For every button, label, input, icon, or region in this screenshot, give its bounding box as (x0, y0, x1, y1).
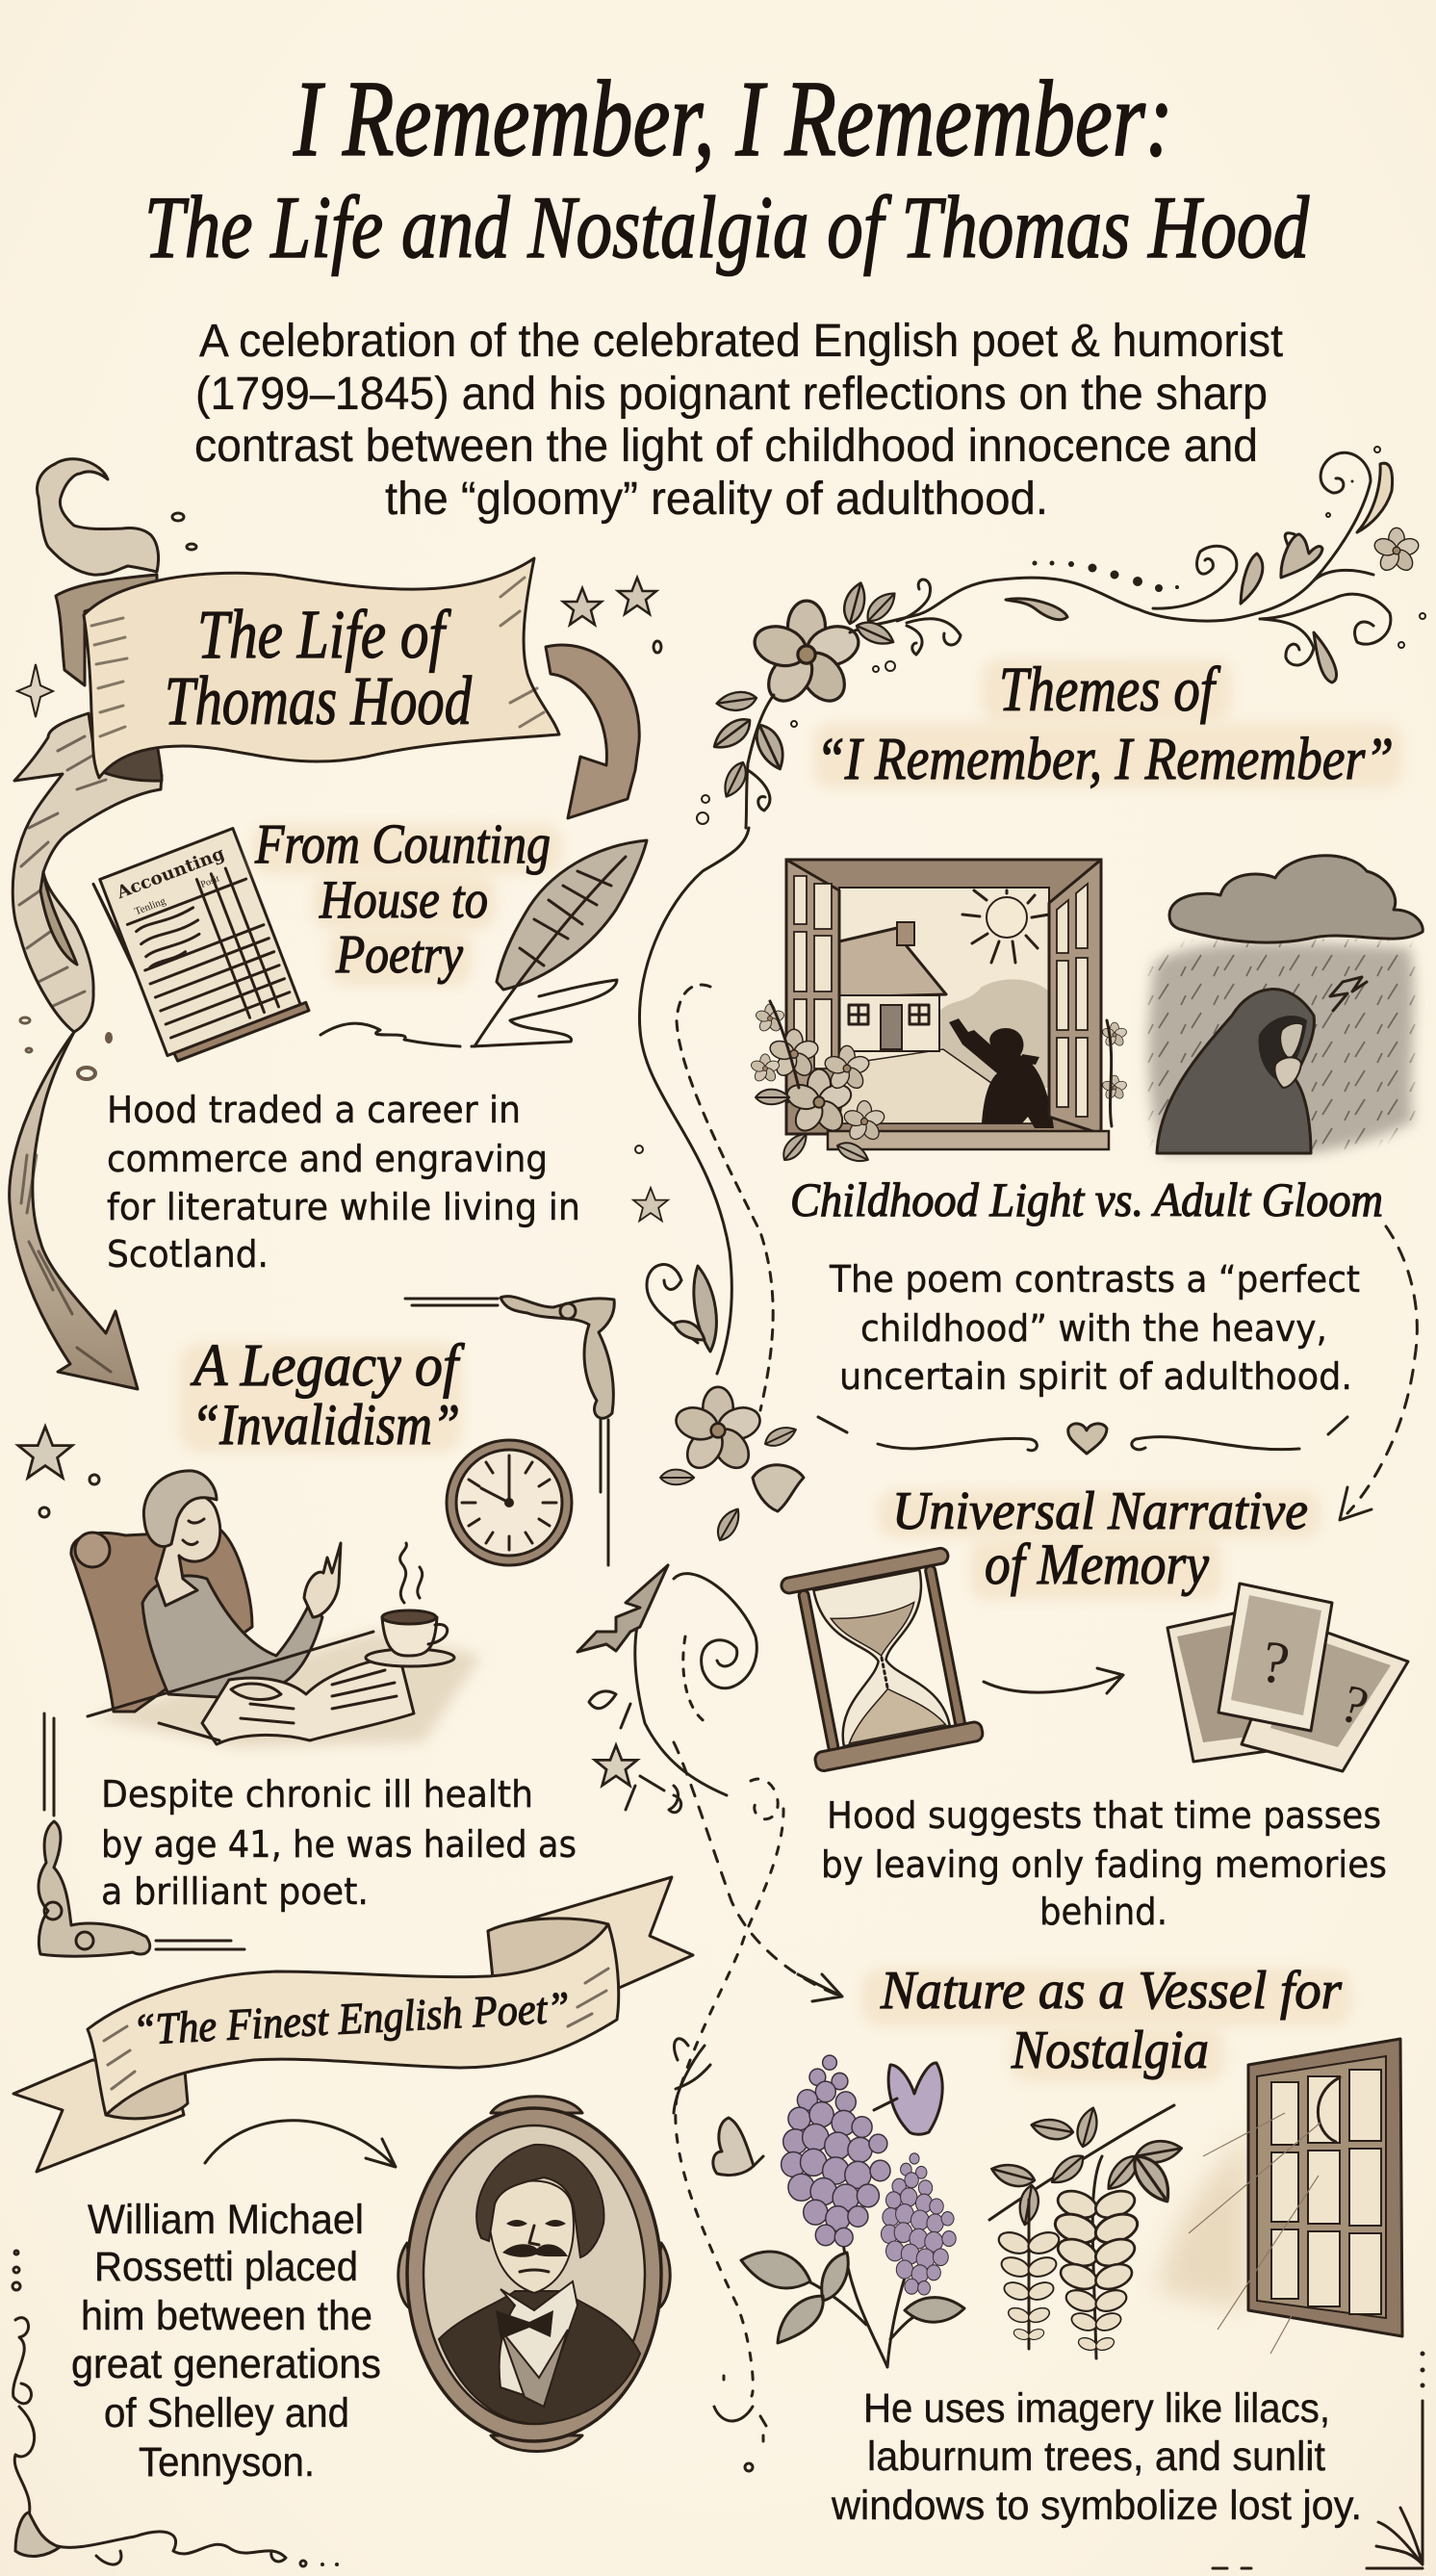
body text: Scotland. (107, 1233, 269, 1275)
section: the finest english poet (13, 1877, 693, 2486)
icon: clock (447, 1440, 572, 1565)
body text: him between the (81, 2293, 372, 2339)
heading: House to (319, 870, 488, 930)
body text: of Shelley and (104, 2390, 349, 2436)
divider with heart (818, 1417, 1347, 1454)
heading (179, 1333, 465, 1456)
banner title: The Life of (197, 596, 451, 673)
body text: childhood” with the heavy, (860, 1307, 1327, 1350)
heading: Nature as a Vessel for (880, 1961, 1342, 2021)
leaves by central flower (660, 1423, 804, 1544)
section: nature as a vessel for nostalgia (713, 1961, 1402, 2529)
icon: quill (321, 840, 647, 1046)
heading (861, 1961, 1352, 2082)
banner: “The Finest English Poet” (132, 1982, 571, 2054)
flowers at the sill (750, 1001, 1128, 1166)
decorative corner lower left of legacy (38, 1713, 244, 1956)
heading: “Invalidism” (192, 1393, 460, 1456)
body text (71, 2197, 381, 2486)
banner title: Thomas Hood (165, 662, 473, 739)
body text: by leaving only fading memories (821, 1843, 1387, 1886)
body text: a brilliant poet. (101, 1870, 369, 1913)
heading (878, 1481, 1321, 1600)
heading: A Legacy of (190, 1333, 465, 1399)
banner title (165, 596, 473, 739)
title: I Remember, I Remember: (293, 60, 1173, 179)
body text (821, 1794, 1387, 1933)
illustration: sunlit window (1155, 2039, 1402, 2354)
illustration: lilacs and butterflies (713, 2055, 964, 2367)
illustration: laburnum branch (989, 2105, 1183, 2358)
banner (13, 1877, 693, 2172)
intro text (194, 316, 1283, 525)
body text: He uses imagery like lilacs, (863, 2385, 1330, 2432)
section: from counting house to poetry (92, 812, 647, 1275)
body text: Tennyson. (139, 2439, 315, 2486)
body text: uncertain spirit of adulthood. (839, 1355, 1352, 1398)
banner: The Life of Thomas Hood (38, 459, 559, 781)
icon: accounting ledger: Accounting (114, 843, 228, 904)
long ribbon arrow: left side (10, 713, 162, 1389)
body text: Hood traded a career in (107, 1089, 521, 1131)
illustration: window with child (750, 860, 1128, 1166)
banner cloth (84, 558, 559, 778)
icon: accounting ledger: Tenling (133, 895, 167, 917)
heading: From Counting (254, 812, 551, 875)
body text (107, 1089, 580, 1275)
intro text: (1799–1845) and his poignant reflections on the sharp (195, 369, 1268, 420)
portrait medallion (398, 2097, 670, 2451)
body text (829, 1258, 1360, 1398)
icon: hourglass (781, 1547, 984, 1772)
dashed arrow to next theme (1340, 1226, 1417, 1520)
body text: windows to symbolize lost joy. (831, 2483, 1362, 2529)
heading: Nostalgia (1011, 2021, 1209, 2080)
heading: Poetry (335, 925, 463, 985)
body text (101, 1773, 577, 1913)
curved arrow beside banner (546, 645, 639, 818)
intro text: the “gloomy” reality of adulthood. (385, 474, 1048, 525)
body text: for literature while living in (107, 1186, 580, 1228)
body text (831, 2385, 1362, 2529)
body text: Hood suggests that time passes (827, 1794, 1381, 1837)
body text: Despite chronic ill health (101, 1773, 533, 1816)
arrow (205, 2121, 396, 2167)
illustration: hooded figure under storm cloud (1145, 856, 1423, 1155)
illustration: Hood at desk (71, 1471, 481, 1747)
body text: behind. (1039, 1891, 1167, 1933)
icon: fading photos (1167, 1584, 1408, 1771)
intro text: contrast between the light of childhood innocence and (194, 421, 1258, 472)
icon: accounting ledger (92, 826, 309, 1067)
decorative corner bottom right (1213, 2351, 1424, 2568)
title (144, 60, 1310, 276)
body text: great generations (71, 2341, 381, 2387)
stars and dots (18, 1427, 99, 1517)
body text: laburnum trees, and sunlit (867, 2434, 1325, 2480)
scroll curl (38, 459, 159, 575)
icon: fading photos: ? (1257, 1629, 1294, 1698)
decorative flourish bottom left (13, 2251, 339, 2566)
flourish and flower: top right (702, 447, 1425, 828)
icon: central flower (672, 1387, 764, 1475)
body text: William Michael (88, 2197, 364, 2243)
intro text: A celebration of the celebrated English poet & humorist (199, 316, 1283, 367)
central vine and swirls (577, 812, 842, 2471)
section: childhood light vs adult gloom (750, 856, 1423, 1520)
arrow (984, 1668, 1123, 1693)
body text: commerce and engraving (107, 1138, 548, 1180)
section heading: themes: Themes of (999, 655, 1220, 725)
section: universal narrative of memory (781, 1481, 1408, 1933)
icon: fading photos: ? (1334, 1673, 1375, 1738)
section: a legacy of invalidism (18, 1333, 577, 1913)
subheading: Childhood Light vs. Adult Gloom (790, 1172, 1383, 1226)
stars and sparkle near banner (17, 513, 661, 717)
decorative corner by legacy heading (405, 1297, 614, 1565)
icon: accounting ledger: Posit (199, 873, 221, 890)
body text: by age 41, he was hailed as (101, 1823, 577, 1866)
body text: Rossetti placed (94, 2244, 358, 2290)
heading (252, 812, 562, 986)
body text: The poem contrasts a “perfect (829, 1258, 1360, 1301)
section heading: themes (813, 655, 1402, 792)
heading: of Memory (985, 1533, 1209, 1596)
heading: Universal Narrative (892, 1481, 1308, 1541)
leaf arrow (577, 1565, 668, 1652)
